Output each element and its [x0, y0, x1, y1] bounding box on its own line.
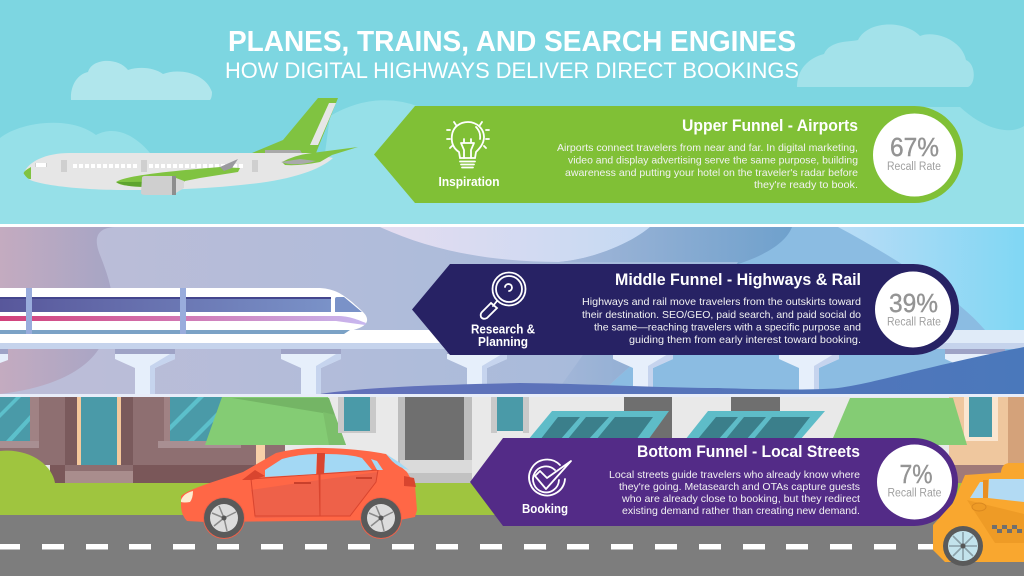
text: bottom funnel description: who are already close to booking, but they redirect — [621, 493, 860, 505]
element: lawn and bush — [0, 451, 1024, 516]
panel: street scene background — [0, 397, 1024, 487]
text: middle funnel description — [582, 296, 861, 346]
tree: left — [205, 397, 346, 471]
icon: red car — [181, 448, 417, 539]
text: inspiration label: Inspiration — [438, 175, 500, 189]
icon: magnifying glass — [481, 272, 526, 319]
heading: bottom funnel: Bottom Funnel - Local Streets — [637, 442, 860, 461]
panel: rail scene background — [0, 227, 1024, 394]
text: upper funnel description: they're ready to book. — [754, 179, 858, 191]
icon: train — [0, 288, 367, 334]
awnings — [528, 411, 825, 440]
text: middle funnel description: Highways and rail move travelers from the outskirts toward — [582, 296, 861, 308]
text: booking label: Booking — [522, 502, 568, 516]
text: research and planning label — [471, 322, 535, 349]
panel: middle funnel callout — [412, 264, 959, 355]
heading: upper funnel: Upper Funnel - Airports — [682, 116, 858, 135]
chart-like wave: foreground hill — [320, 347, 1024, 394]
text: middle funnel description: their destination. SEO/GEO, paid search, and paid social do — [582, 309, 861, 321]
heading: main title: PLANES, TRAINS, AND SEARCH ENGINES — [228, 26, 796, 58]
window: white house — [338, 397, 529, 433]
icon: lightbulb — [447, 122, 489, 168]
callout: 39 percent recall rate — [875, 272, 951, 348]
door: white house — [398, 397, 780, 485]
text: bottom funnel description: Local streets guide travelers who already know where — [609, 469, 860, 481]
icon: upper right cloud — [797, 24, 974, 87]
text: research and planning label: Research & — [471, 322, 535, 336]
text: upper funnel description: awareness and putting your hotel on the traveler's radar before — [565, 167, 858, 179]
callout: 7 percent recall rate: 7% — [900, 459, 932, 489]
panel: bottom funnel callout — [470, 438, 958, 526]
text: upper funnel description: video and display advertising serve the same purpose, building — [568, 154, 858, 166]
divider strips — [0, 224, 1024, 227]
callout: 67 percent recall rate: 67% — [890, 132, 939, 162]
door: brick house — [65, 397, 133, 483]
element: road — [0, 515, 1024, 576]
callout: 39 percent recall rate: Recall Rate — [887, 316, 941, 328]
text: middle funnel description: guiding them from early interest toward booking. — [629, 334, 861, 346]
panel: sky background — [0, 0, 1024, 224]
callout: 67 percent recall rate — [873, 114, 956, 196]
text: middle funnel description: the same—reaching travelers with a specific purpose and — [594, 322, 861, 334]
icon: upper left cloud — [71, 61, 212, 100]
text: upper funnel description — [557, 142, 858, 191]
callout: 7 percent recall rate — [877, 444, 952, 520]
tree: right — [830, 398, 967, 445]
callout: 39 percent recall rate: 39% — [889, 288, 938, 318]
element: viaduct track and pillars — [0, 330, 1024, 394]
window: brick house right — [158, 397, 241, 448]
text: upper funnel description: Airports connect travelers from near and far. In digital marketing, — [557, 142, 858, 154]
window: brick house left — [0, 397, 39, 448]
panel: upper funnel callout — [374, 106, 963, 203]
text: bottom funnel description — [609, 469, 860, 517]
heading: subtitle: HOW DIGITAL HIGHWAYS DELIVER DIRECT BOOKINGS — [225, 58, 799, 83]
callout: 67 percent recall rate: Recall Rate — [887, 161, 941, 173]
callout: 7 percent recall rate: Recall Rate — [888, 488, 942, 500]
text: bottom funnel description: they're going. Metasearch and OTAs capture guests — [619, 481, 860, 493]
peach house — [920, 397, 1024, 485]
icon: airplane — [24, 98, 358, 195]
icon: check badge — [529, 460, 571, 496]
heading: middle funnel: Middle Funnel - Highways & Rail — [615, 270, 861, 289]
text: bottom funnel description: existing demand rather than creating new demand. — [622, 505, 860, 517]
text: research and planning label: Planning — [478, 335, 528, 349]
icon: taxi — [933, 463, 1024, 566]
